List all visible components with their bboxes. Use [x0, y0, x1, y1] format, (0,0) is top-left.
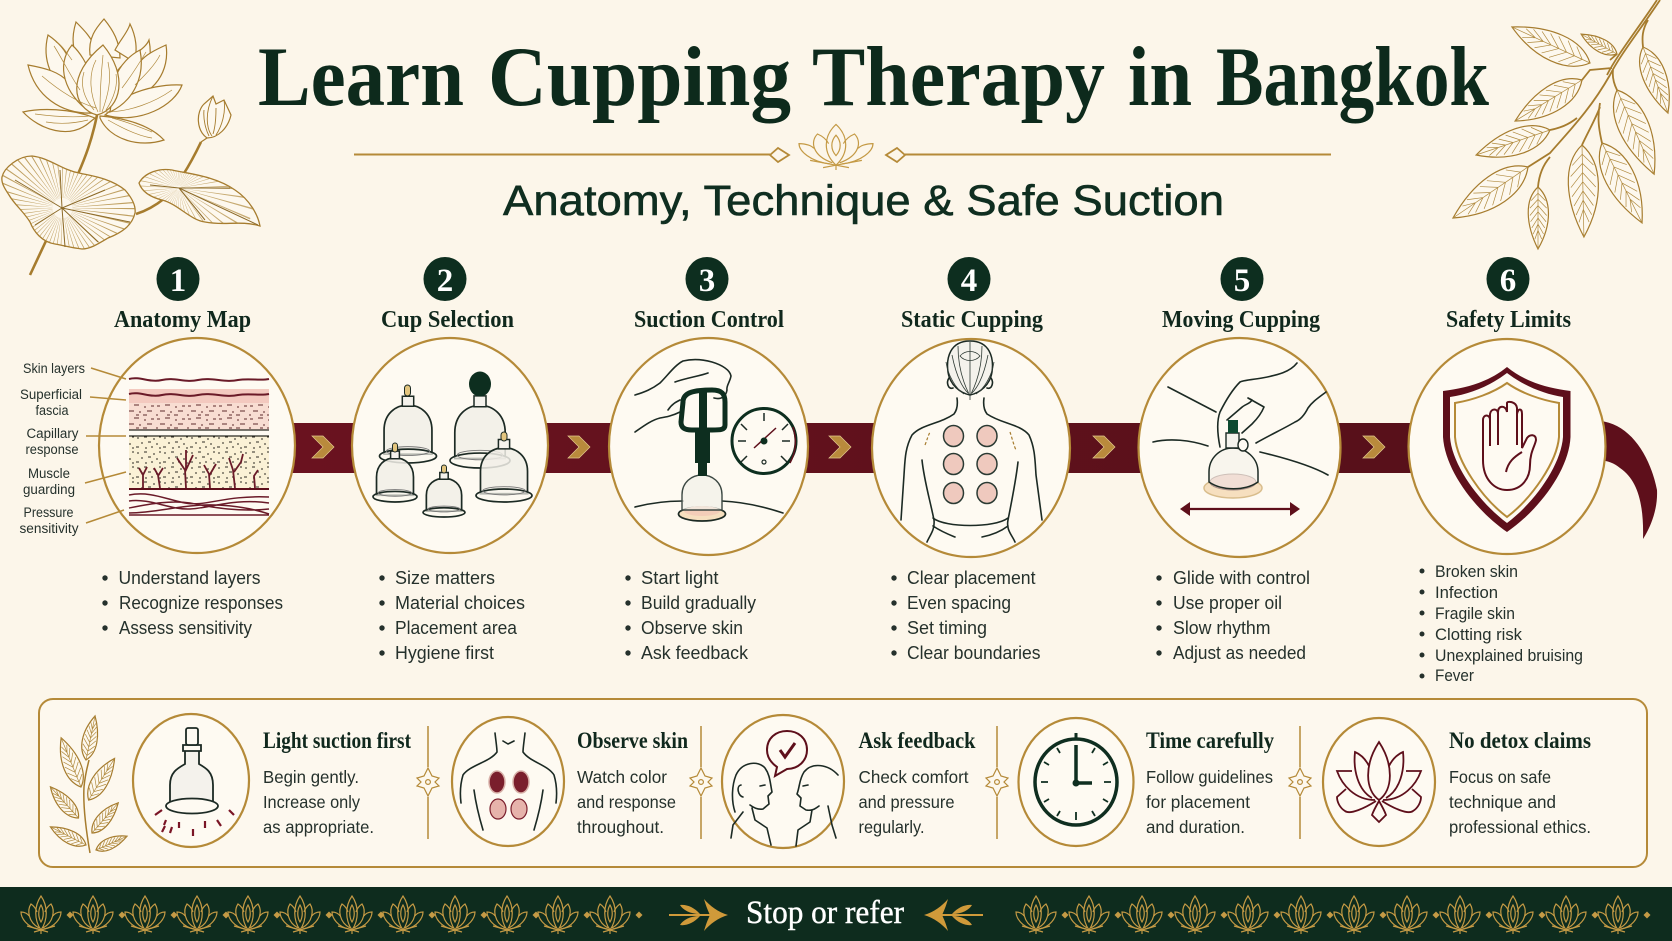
bullet list 6: Broken skin: [1435, 563, 1518, 581]
back figure: [901, 341, 1042, 542]
step 2: cup selection: [352, 257, 548, 663]
suction cup on skin: [678, 475, 726, 521]
ornament lotus: [799, 124, 873, 170]
lotus petals: [23, 19, 182, 143]
panel leaf sprig: [45, 714, 129, 855]
footer lotus border left: [21, 896, 642, 934]
double-headed motion arrow: [1180, 502, 1300, 516]
heading: suction control: Suction Control: [634, 307, 784, 333]
moving cupping circle: [1138, 338, 1340, 557]
suction circle: [609, 338, 808, 555]
layer labels: guarding: [23, 482, 75, 497]
layer labels: sensitivity: [20, 521, 79, 536]
branch leaves: [1445, 15, 1672, 249]
title: in: [1128, 30, 1192, 124]
subtitle: Anatomy, Technique & Safe Suction: [503, 177, 1224, 225]
number badge 2: 2: [437, 263, 453, 299]
text: time carefully: [1146, 728, 1274, 837]
footer sprig right: [924, 899, 983, 931]
text: observe skin: and response: [577, 792, 676, 812]
stop hand: [1483, 402, 1536, 490]
cups illustration: [373, 372, 532, 517]
title: Therapy: [812, 30, 1105, 124]
bullet list 2: Material choices: [395, 593, 525, 613]
text: no detox claims: No detox claims: [1449, 728, 1591, 753]
bullet list 3: Ask feedback: [641, 643, 749, 663]
number badge 4: 4: [961, 263, 977, 299]
shield: [1443, 367, 1570, 532]
text: light suction first: as appropriate.: [263, 817, 374, 837]
text: observe skin: Observe skin: [577, 728, 688, 753]
step 6: safety limits: [1408, 257, 1606, 685]
panel: key reminders: [39, 699, 1647, 867]
text: time carefully: for placement: [1146, 792, 1250, 812]
heading: cup selection: Cup Selection: [381, 307, 514, 333]
connector ribbon: [290, 421, 1657, 539]
text: observe skin: Watch color: [577, 767, 667, 787]
text: light suction first: Begin gently.: [263, 767, 359, 787]
pressure gauge: [732, 408, 796, 474]
bullet list 1: Recognize responses: [119, 593, 283, 613]
bullet list 1: Understand layers: [118, 568, 260, 588]
ornament diamonds: [770, 148, 905, 162]
footer sprig left: [669, 899, 728, 931]
title: Learn: [258, 30, 464, 124]
text: no detox claims: [1449, 728, 1591, 837]
text: time carefully: and duration.: [1146, 817, 1245, 837]
layer labels: response: [26, 442, 78, 457]
layer labels: Skin layers: [23, 361, 85, 376]
text: observe skin: [577, 728, 688, 837]
bullet list 6: [1420, 563, 1583, 685]
safety circle: [1408, 339, 1606, 554]
item: ask feedback: [722, 715, 976, 848]
number badge 6: 6: [1500, 263, 1516, 299]
layer labels: Capillary: [26, 426, 79, 441]
title divider with lotus ornament: [354, 124, 1331, 170]
bullet list 2: [379, 568, 525, 663]
dividers with ornaments: [417, 726, 1311, 839]
icon circle: maroon lotus: [1323, 718, 1435, 846]
bullet list 3: Build gradually: [641, 593, 756, 613]
layer labels: fascia: [36, 403, 69, 418]
text: ask feedback: and pressure: [858, 792, 954, 812]
step 4: static cupping: [872, 257, 1070, 663]
text: ask feedback: [858, 728, 976, 837]
icon circle: two faces and speech bubble: [722, 715, 844, 848]
step 3: suction control: [609, 257, 808, 663]
layer labels: Superficial: [20, 387, 82, 402]
heading: moving cupping: Moving Cupping: [1162, 307, 1320, 333]
footer lotus border right: [1016, 896, 1650, 934]
number badge 4: [948, 257, 990, 301]
title: [258, 30, 1490, 124]
icon circle: cup with suction marks: [133, 714, 249, 847]
bullet list 6: Unexplained bruising: [1435, 647, 1583, 665]
label leader lines: [85, 368, 126, 523]
icon circle: back with marks: [452, 717, 564, 846]
text: no detox claims: technique and: [1449, 792, 1556, 812]
step 1: anatomy map: [20, 257, 295, 638]
text: light suction first: Light suction first: [263, 728, 411, 753]
bullet list 3: Observe skin: [641, 618, 743, 638]
static cupping circle: [872, 339, 1070, 557]
bullet list 2: Placement area: [395, 618, 518, 638]
bullet list 6: Infection: [1435, 584, 1498, 602]
text: no detox claims: Focus on safe: [1449, 767, 1551, 787]
text: ask feedback: regularly.: [858, 817, 924, 837]
title: Bangkok: [1216, 30, 1490, 124]
six cups on back: [944, 426, 997, 504]
lotus stems: [30, 115, 201, 275]
bullet list 1: Assess sensitivity: [119, 618, 252, 638]
moving cup: [1204, 420, 1262, 498]
item: time carefully: [1018, 718, 1274, 846]
heading: anatomy map: Anatomy Map: [114, 307, 251, 333]
lotus leaf left: [2, 156, 135, 253]
bullet list 4: Clear placement: [907, 568, 1036, 588]
lotus leaf right: [138, 168, 261, 227]
text: time carefully: Time carefully: [1146, 728, 1274, 753]
bullet list 6: Clotting risk: [1435, 626, 1523, 644]
anatomy circle: [99, 338, 295, 553]
footer banner: [0, 887, 1672, 941]
number badge 3: 3: [699, 263, 715, 299]
bullet list 1: [102, 568, 283, 638]
bullet list 4: [891, 568, 1040, 663]
text: time carefully: Follow guidelines: [1146, 767, 1273, 787]
cup selection circle: [352, 338, 548, 553]
item: no detox claims: [1323, 718, 1591, 846]
hand and pump: [635, 359, 731, 476]
item: light suction first: [133, 714, 411, 847]
heading: safety limits: Safety Limits: [1446, 307, 1571, 333]
bullet list 6: Fragile skin: [1435, 605, 1515, 623]
arrow chevrons: [312, 436, 1385, 458]
skin line: [635, 501, 783, 513]
bullet list 5: Adjust as needed: [1173, 643, 1306, 663]
number badge 6: [1486, 257, 1530, 301]
text: observe skin: throughout.: [577, 817, 664, 837]
bullet list 3: [625, 568, 756, 663]
ribbon tail: [1600, 421, 1657, 539]
icon circle: clock: [1018, 718, 1134, 846]
text: light suction first: Increase only: [263, 792, 360, 812]
bullet list 2: Hygiene first: [395, 643, 494, 663]
bullet list 5: Glide with control: [1173, 568, 1310, 588]
branch stems: [1528, 0, 1660, 187]
decoration: hanging leaf branch: [1445, 0, 1672, 249]
bullet list 5: Slow rhythm: [1173, 618, 1270, 638]
text: ask feedback: Ask feedback: [858, 728, 976, 753]
layer labels: Muscle: [28, 466, 70, 481]
number badge 1: [156, 257, 200, 301]
step 5: moving cupping: [1138, 257, 1340, 663]
layer labels: Pressure: [24, 505, 74, 520]
decoration: lotus flower with leaves: [2, 19, 260, 275]
bullet list 5: [1156, 568, 1310, 663]
layer labels: [20, 361, 85, 536]
bullet list 6: Fever: [1435, 667, 1474, 685]
text: ask feedback: Check comfort: [858, 767, 969, 787]
skin layer cross-section: [129, 378, 269, 515]
bullet list 4: Clear boundaries: [907, 643, 1040, 663]
footer label: Stop or refer: [746, 895, 904, 931]
hand and body contour: [1153, 363, 1328, 475]
bullet list 4: Even spacing: [907, 593, 1011, 613]
lotus bud: [198, 96, 231, 142]
item: observe skin: [452, 717, 688, 846]
number badge 5: 5: [1234, 263, 1250, 299]
number badge 1: 1: [170, 263, 186, 299]
title: Cupping: [488, 30, 791, 124]
number badge 2: [424, 257, 466, 301]
bullet list 5: Use proper oil: [1173, 593, 1282, 613]
text: no detox claims: professional ethics.: [1449, 817, 1591, 837]
text: light suction first: [263, 728, 411, 837]
bullet list 3: Start light: [641, 568, 718, 588]
bullet list 4: Set timing: [907, 618, 987, 638]
bullet list 2: Size matters: [395, 568, 495, 588]
number badge 3: [686, 257, 728, 301]
heading: static cupping: Static Cupping: [901, 307, 1043, 333]
number badge 5: [1220, 257, 1264, 301]
